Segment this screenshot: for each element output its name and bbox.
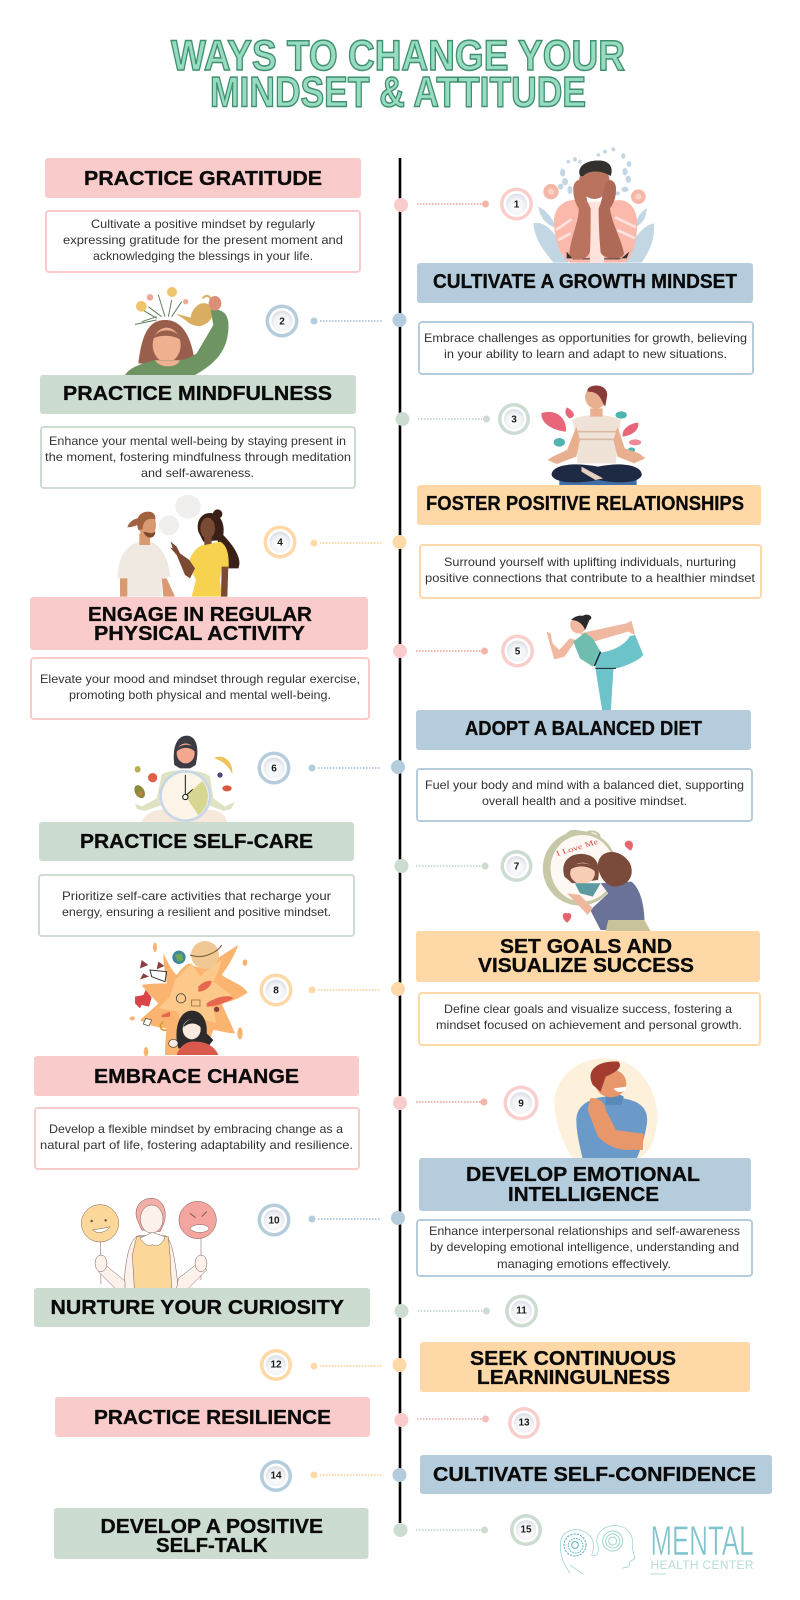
step: practice self-care (39, 822, 354, 936)
step 8 marker (260, 974, 405, 1006)
illustration: woman smiling at herself in a heart-topped mirror (543, 831, 651, 931)
text block: emotional intelligence description: Enhance interpersonal relationships and self-awareness (429, 1224, 740, 1238)
heading: engage in regular physical activity: ENGAGE IN REGULAR (88, 604, 313, 626)
title: MINDSET & ATTITUDE (210, 68, 586, 116)
step 11 marker (394, 1294, 538, 1328)
illustration: woman thinking with bursting orange explosion of ideas (130, 941, 248, 1056)
heading: foster positive relationships (417, 485, 761, 525)
step 3 marker (396, 403, 530, 435)
heading: embrace change (34, 1056, 359, 1096)
text block: goals description: Define clear goals and visualize success, fostering a (444, 1002, 732, 1016)
step: practice mindfulness (40, 375, 356, 488)
illustration: woman holding happy and angry face masks (81, 1198, 216, 1288)
text block: change description: Develop a flexible mindset by embracing change as a (49, 1122, 343, 1136)
heading: develop a positive self-talk: DEVELOP A POSITIVE (100, 1516, 323, 1538)
heading: set goals and visualize success: VISUALIZE SUCCESS (478, 955, 694, 977)
number badge 10 (258, 1204, 290, 1236)
heading: engage in regular physical activity (30, 597, 368, 650)
title: WAYS TO CHANGE YOUR (171, 32, 625, 80)
step 13 marker (394, 1407, 540, 1439)
text block: mindfulness description (41, 427, 355, 488)
heading: practice mindfulness (40, 375, 356, 414)
text block: emotional intelligence description (417, 1220, 752, 1276)
text block: diet description: Fuel your body and mind with a balanced diet, supporting (425, 778, 744, 792)
step 15 marker (394, 1514, 542, 1546)
number badge 5 (501, 634, 534, 668)
step 12 marker (260, 1349, 406, 1381)
text block: mindfulness description: and self-awareness. (141, 466, 254, 480)
number badge 9 (504, 1086, 538, 1120)
text block: relationships description (420, 545, 761, 598)
text block: mindfulness description: the moment, fostering mindfulness through meditation (45, 450, 351, 464)
text block: self-care description: energy, ensuring a resilient and positive mindset. (62, 905, 331, 919)
number badge 14 (260, 1460, 292, 1492)
text block: gratitude description: expressing gratitude for the present moment and (63, 233, 343, 247)
number badge 13: 13 (518, 1418, 530, 1428)
text block: emotional intelligence description: managing emotions effectively. (497, 1257, 671, 1271)
heading: practice self-care (39, 822, 354, 861)
text block: gratitude description: acknowledging the blessings in your life. (93, 249, 313, 263)
step 5 marker (393, 634, 534, 668)
heading: adopt a balanced diet: ADOPT A BALANCED DIET (465, 718, 702, 740)
text block: goals description (419, 993, 760, 1045)
number badge 6: 6 (271, 764, 277, 774)
heading: develop emotional intelligence: INTELLIGENCE (508, 1184, 659, 1206)
number badge 12: 12 (270, 1360, 282, 1370)
text block: self-care description: Prioritize self-care activities that recharge your (62, 889, 331, 903)
illustration: man and woman in conversation with speech bubbles (117, 495, 239, 597)
heading: practice resilience (55, 1397, 370, 1437)
text block: change description: natural part of life, fostering adaptability and resilience. (40, 1138, 353, 1152)
number badge 8: 8 (273, 986, 279, 996)
heading: cultivate self-confidence (420, 1455, 772, 1494)
step 7 marker (394, 850, 532, 882)
number badge 11 (505, 1294, 538, 1328)
heading: develop emotional intelligence: DEVELOP EMOTIONAL (466, 1164, 700, 1186)
text block: goals description: mindset focused on achievement and personal growth. (436, 1018, 742, 1032)
text block: growth mindset description (419, 322, 753, 374)
number badge 15: 15 (520, 1524, 532, 1536)
step: set goals and visualize success (416, 931, 760, 1045)
step 6 marker (258, 752, 405, 784)
step: engage in regular physical activity (30, 597, 369, 719)
step 4 marker (264, 526, 406, 558)
heading: develop a positive self-talk (54, 1508, 368, 1559)
step 1 marker (394, 188, 533, 220)
heading: adopt a balanced diet (416, 710, 751, 750)
text block: growth mindset description: in your ability to learn and adapt to new situations. (444, 347, 727, 361)
step 9 marker (393, 1086, 538, 1120)
number badge 13 (508, 1407, 540, 1439)
number badge 1: 1 (514, 200, 520, 210)
heading: practice gratitude: PRACTICE GRATITUDE (84, 168, 322, 190)
number badge 12 (260, 1349, 292, 1381)
text block: activity description (31, 658, 369, 719)
text block: activity description: Elevate your mood and mindset through regular exercise, (40, 672, 360, 686)
heading: growth mindset (417, 263, 753, 303)
step 2 marker (266, 304, 406, 338)
heading: cultivate self-confidence: CULTIVATE SELF-CONFIDENCE (433, 1464, 756, 1486)
illustration: woman watering flowers growing from her head (125, 287, 228, 375)
heading: practice self-care: PRACTICE SELF-CARE (80, 831, 313, 853)
heading: nurture your curiosity: NURTURE YOUR CURIOSITY (50, 1297, 345, 1319)
text block: relationships description: positive connections that contribute to a healthier mindset (425, 571, 756, 585)
heading: nurture your curiosity (34, 1288, 370, 1327)
step 14 marker (260, 1460, 406, 1492)
text block: growth mindset description: Embrace challenges as opportunities for growth, believing (424, 331, 747, 345)
step: embrace change (34, 1056, 359, 1169)
text block: emotional intelligence description: by developing emotional intelligence, understanding and (430, 1240, 739, 1254)
illustration: smiling man hugging himself in blue sweater (554, 1058, 657, 1158)
number badge 4 (264, 526, 296, 558)
timeline spine (399, 158, 401, 1523)
step 10 marker (258, 1204, 405, 1236)
text block: mindfulness description: Enhance your mental well-being by staying present in (49, 434, 346, 448)
number badge 8 (260, 974, 292, 1006)
illustration: woman smiling at herself in a heart-topped mirror: I Love Me (553, 838, 602, 858)
step: practice gratitude (45, 158, 361, 272)
text block: diet description: overall health and a positive mindset. (482, 794, 687, 808)
number badge 5: 5 (515, 646, 521, 658)
step: adopt a balanced diet (416, 710, 752, 821)
number badge 3: 3 (511, 414, 517, 426)
illustration: woman in standing yoga bow pose (546, 615, 643, 710)
heading: develop a positive self-talk: SELF-TALK (156, 1535, 268, 1557)
heading: practice mindfulness: PRACTICE MINDFULNESS (63, 383, 332, 405)
text block: activity description: promoting both physical and mental well-being. (69, 688, 331, 702)
number badge 4: 4 (277, 538, 283, 548)
text block: diet description (417, 769, 752, 821)
heading: set goals and visualize success: SET GOALS AND (500, 936, 672, 958)
step: develop emotional intelligence (417, 1158, 752, 1276)
number badge 2: 2 (279, 316, 285, 328)
text block: self-care description (39, 875, 354, 936)
logo: mental health center (560, 1517, 754, 1574)
illustration: man meditating cross-legged with leaves (541, 385, 645, 485)
heading: foster positive relationships: FOSTER POSITIVE RELATIONSHIPS (426, 493, 744, 515)
heading: practice resilience: PRACTICE RESILIENCE (94, 1407, 331, 1429)
heading: seek continuous learningulness (420, 1342, 750, 1392)
heading: set goals and visualize success (416, 931, 760, 982)
number badge 9: 9 (518, 1098, 524, 1110)
title (171, 32, 625, 116)
number badge 11: 11 (516, 1306, 527, 1316)
heading: seek continuous learningulness: LEARNINGULNESS (477, 1367, 670, 1389)
text block: relationships description: Surround yourself with uplifting individuals, nurturing (444, 555, 736, 569)
text block: gratitude description (46, 211, 360, 272)
icon: two head profiles with tangled and untangled brains (560, 1526, 635, 1574)
number badge 2 (266, 304, 298, 338)
heading: seek continuous learningulness: SEEK CONTINUOUS (470, 1348, 676, 1370)
logo wordmark: HEALTH CENTER (650, 1558, 754, 1572)
text block: change description (35, 1108, 359, 1169)
number badge 6 (258, 752, 290, 784)
number badge 10: 10 (268, 1216, 280, 1226)
step: foster positive relationships (417, 485, 761, 598)
number badge 7: 7 (514, 862, 520, 872)
step: cultivate a growth mindset (417, 263, 753, 374)
logo wordmark (650, 1517, 754, 1574)
heading: engage in regular physical activity: PHYSICAL ACTIVITY (94, 623, 306, 645)
text block: gratitude description: Cultivate a positive mindset by regularly (91, 217, 315, 231)
heading: develop emotional intelligence (419, 1158, 751, 1211)
number badge 15 (510, 1514, 542, 1546)
heading: embrace change: EMBRACE CHANGE (94, 1066, 299, 1088)
illustration: man resting face on hands among leaves (533, 147, 654, 263)
heading: practice gratitude (45, 158, 361, 198)
heading: growth mindset: CULTIVATE A GROWTH MINDSET (433, 271, 737, 293)
illustration: woman meditating behind a clock with food (132, 736, 235, 822)
number badge 14: 14 (270, 1470, 282, 1482)
